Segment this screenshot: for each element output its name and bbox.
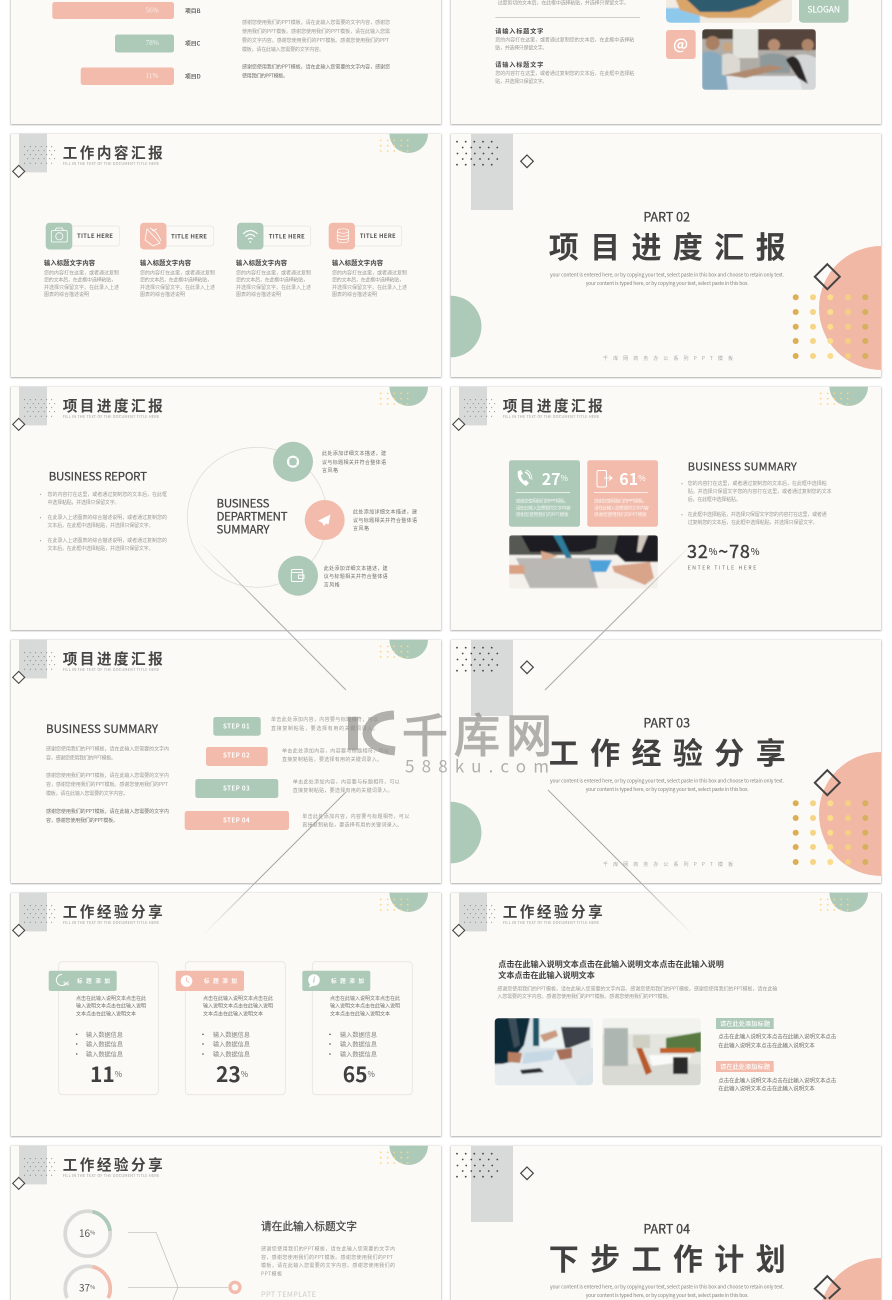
text block: node 1 <box>322 450 386 474</box>
heading: 项目进度汇报 <box>63 648 163 669</box>
text block: column 2 <box>140 258 215 298</box>
step 04: STEP 04 <box>223 815 250 824</box>
text block: summary: BUSINESS SUMMARY <box>46 721 159 737</box>
text block: business summary: 您的内容打在这里，或者通过复制您的文本后，在此框中选择粘 <box>688 480 827 487</box>
photo: laptop meeting <box>509 535 658 589</box>
card: 11 percent: 输入说明文本点击在此输入说明 <box>76 1002 146 1010</box>
stat card: 27 percent <box>509 460 580 527</box>
text block: column 2: 输入标题文字内容 <box>140 258 192 267</box>
text block: business summary: 在此框中选择粘贴，并选择只保留文字您的内容打在这里，或者通 <box>688 511 827 518</box>
stat card: 27 percent: 27% <box>542 466 569 490</box>
watermark: 588ku.com <box>405 752 549 778</box>
badge: slogan: SLOGAN <box>807 4 840 16</box>
heading: FILL IN THE TEXT OF THE DOCUMENT TITLE HERE <box>63 162 160 167</box>
text block: summary: 感谢您使用我们的PPT模板，请在此输入您需要的文字内 <box>46 772 169 779</box>
slide: section part 02 <box>451 134 881 377</box>
connector lines <box>128 1232 228 1300</box>
card: 23 percent: 标题添加 <box>204 977 237 985</box>
text block: node 2: 言风格 <box>353 525 369 532</box>
text block: bar notes: 感谢您使用我们的PPT模板，请在此输入您需要的文字内容，感谢您 <box>242 64 390 70</box>
step 04 <box>185 811 409 830</box>
watermark diagonal lines <box>197 540 693 935</box>
card: camera title: TITLE HERE <box>77 231 113 240</box>
section heading: 下步工作计划 <box>549 1235 786 1279</box>
text block: collage copy: 您的内容打在这里，或者通过复制您的文本后，在此框中选择粘 <box>495 36 634 44</box>
card: 65 percent: 输入说明文本点击在此输入说明 <box>330 1002 400 1010</box>
stat card: 27 percent: 请在此输入您需要的文字内容 <box>516 504 571 511</box>
section heading: 工作经验分享 <box>549 729 786 773</box>
card: 23 percent <box>176 962 285 1095</box>
step 02: 单击此处添加内容，内容要与标题相符，可以 <box>282 748 389 754</box>
heading: FILL IN THE TEXT OF THE DOCUMENT TITLE HERE <box>63 1174 160 1179</box>
text block: column 1: 图表的综合描述说明 <box>44 291 89 298</box>
section heading <box>549 206 786 362</box>
text block: summary: 模板，请在此输入您需要的文字内容。 <box>46 790 128 797</box>
section heading: your content is entered here, or by copying your text, select paste in this box and choose to retain only text. <box>550 1284 785 1290</box>
section heading: your content is typed here, or by copying your text, select paste in this box. <box>586 280 749 287</box>
text block: column 4: 您的内容打在这里，或者通过复制 <box>332 270 407 276</box>
card: 65 percent: 文本点击在此输入说明文本 <box>330 1010 390 1018</box>
text block: intro: 入您需要的文字内容。感谢您使用我们的PPT模板。感谢您使用我们的PPT模板。 <box>497 993 672 1000</box>
step 01: STEP 01 <box>223 721 250 730</box>
chart: ring 37 percent: 37% <box>79 1280 95 1294</box>
icon: wallet node <box>278 556 318 596</box>
note: green tag: 请在此处添加标题 <box>720 1019 770 1028</box>
header decoration <box>13 134 428 177</box>
section heading: PART 03 <box>643 712 690 731</box>
heading: 工作经验分享 <box>63 901 163 922</box>
watermark: 千库网 <box>402 700 552 766</box>
slide: two photos with notes <box>451 893 881 1136</box>
section decoration <box>451 640 881 876</box>
card: megaphone title: TITLE HERE <box>171 231 207 240</box>
card: 65 percent: 输入数据信息 <box>340 1050 377 1058</box>
photo: conference room <box>602 1018 701 1086</box>
heading: 工作经验分享 <box>503 901 603 922</box>
card: 11 percent: 点击在此输入说明文本点击在此 <box>76 995 146 1002</box>
card: 23 percent: 点击在此输入说明文本点击在此 <box>203 995 273 1002</box>
note: green tag: 点击在此输入说明文本点击在此输入说明文本点击 <box>718 1033 837 1041</box>
text block: summary: 容，感谢您使用我们的PPT模板。 <box>46 817 118 824</box>
stat card: 61 percent <box>587 460 658 527</box>
text block: node 3 <box>324 565 388 588</box>
text block: ring notes: 感谢您使用我们的PPT模板，请在此输入您需要的文字内 <box>261 1246 395 1252</box>
text block: column 3: 图表的综合描述说明 <box>236 291 281 298</box>
card: 11 percent: 标题添加 <box>77 977 110 985</box>
heading: FILL IN THE TEXT OF THE DOCUMENT TITLE HERE <box>503 415 600 420</box>
text block: column 3: 您的文本后，在此框中选择粘贴， <box>236 277 308 284</box>
text block: business report: 中选择粘贴，并选择只保留文字。 <box>48 499 120 506</box>
text block: node 1: 议与标题相关并符合整体语 <box>322 459 386 466</box>
card: megaphone title <box>140 223 214 250</box>
card: 11 percent: 11% <box>90 1059 123 1089</box>
text block: collage copy: 请输入标题文字 <box>495 26 543 36</box>
section heading: your content is entered here, or by copying your text, select paste in this box and choose to retain only text. <box>550 778 785 784</box>
chart: ring 16 percent: 16% <box>79 1225 95 1240</box>
text block: column 1: 您的文本后，在此框中选择粘贴， <box>44 277 116 284</box>
text block: column 1: 输入标题文字内容 <box>44 258 96 267</box>
slide: three percent cards <box>11 893 441 1136</box>
heading: FILL IN THE TEXT OF THE DOCUMENT TITLE HERE <box>63 668 160 673</box>
step 03 <box>195 778 400 798</box>
bar chart: horizontal project bars <box>52 2 201 85</box>
text block: intro: 感谢您使用我们的PPT模板，请在此输入您需要的文字内容。感谢您使用我们的PPT模板。感谢您使用我们的PPT模板，请在此输 <box>497 986 777 992</box>
text block: node 3: 议与标题相关并符合整体语 <box>324 573 388 580</box>
badge: at sign: @ <box>673 33 688 54</box>
card: 11 percent: 输入数据信息 <box>86 1030 123 1039</box>
card: 23 percent: 输入数据信息 <box>213 1040 250 1048</box>
text block: column 3: 您的内容打在这里，或者通过复制 <box>236 270 311 276</box>
step 01: 单击此处添加内容，内容要与标题相符，可以 <box>271 716 378 723</box>
card: database title: TITLE HERE <box>360 231 396 240</box>
step 03: 直接复制粘贴，要选择有用的关键词录入。 <box>293 787 393 794</box>
text block: column 3 <box>236 258 311 298</box>
text block: business report: BUSINESS REPORT <box>49 468 147 484</box>
icon: connector node <box>230 1282 240 1292</box>
icon: lifebuoy node <box>273 442 313 482</box>
step 02: 直接复制粘贴，要选择有用的关键词录入。 <box>282 756 382 763</box>
slide: project bars (cropped top left) <box>11 0 441 124</box>
section heading <box>549 1218 786 1299</box>
stat card: 61 percent: 感谢您使用我们的PPT模板。 <box>594 497 647 504</box>
text block: ring notes: 请在此输入标题文字 <box>261 1219 357 1234</box>
card: 23 percent: 23% <box>216 1059 249 1089</box>
stat card: 61 percent: 请在此输入您需要的文字内容 <box>594 504 649 511</box>
step 01: 直接复制粘贴，要选择有用的关键词录入。 <box>271 725 378 732</box>
header decoration <box>13 1146 428 1189</box>
text block: collage copy: 您的内容打在这里，或者通过复制您的文本后，在此框中选择粘 <box>495 70 634 77</box>
section heading: your content is typed here, or by copying your text, select paste in this box. <box>586 1292 749 1299</box>
text block: bar notes: 模板，请在此输入您需要的文字内容。 <box>242 46 324 53</box>
step 04: 直接复制粘贴，要选择有用的关键词录入。 <box>302 822 402 828</box>
text block: column 2: 您的内容打在这里，或者通过复制 <box>140 270 215 276</box>
text block: summary: 容，感谢您使用我们的PPT模板。 <box>46 754 116 762</box>
badge: at sign <box>666 30 696 59</box>
text block: business summary <box>681 459 832 526</box>
text block: node 3: 言风格 <box>324 582 340 588</box>
text block: intro: 点击在此输入说明文本点击在此输入说明文本点击在此输入说明 <box>498 959 724 970</box>
section heading <box>549 712 786 868</box>
text block: business report: 在此录入上述图表的综合描述说明，或者通过复制您的 <box>48 537 167 544</box>
card: 65 percent: 输入数据信息 <box>340 1030 377 1039</box>
section decoration <box>456 1146 881 1300</box>
card: 11 percent <box>49 962 158 1095</box>
text block: ring notes: PPT TEMPLATE <box>261 1289 316 1300</box>
photo: business discussion <box>494 1018 594 1086</box>
card: camera title <box>46 223 120 250</box>
heading: 项目进度汇报 <box>503 395 603 416</box>
photo: calculator <box>666 0 792 23</box>
card: 65 percent <box>302 962 412 1095</box>
slide: business report circle diagram <box>11 387 441 630</box>
card: 23 percent: 输入数据信息 <box>213 1050 250 1058</box>
badge: slogan <box>799 0 848 23</box>
card: 11 percent: 输入数据信息 <box>86 1040 123 1048</box>
text block: column 4: 并选择只保留文字。在此录入上述 <box>332 284 407 291</box>
heading: FILL IN THE TEXT OF THE DOCUMENT TITLE HERE <box>63 921 160 926</box>
chart: ring 16 percent <box>65 1211 110 1256</box>
text block: bar notes: 使用我们的PPT模板。感谢您使用我们的PPT模板，请在此输入您需 <box>242 28 390 35</box>
bar chart: horizontal project bars: 56% <box>146 6 159 14</box>
diagram: department circle <box>187 442 345 596</box>
text block: business report <box>40 468 167 552</box>
text block: collage copy: 贴，并选择只保留文字。 <box>495 78 547 85</box>
text block: collage copy: 贴，并选择只保留文字。 <box>495 44 547 52</box>
card: wifi title <box>237 223 311 250</box>
text block: column 3: 输入标题文字内容 <box>236 258 288 267</box>
heading: 工作内容汇报 <box>63 142 163 163</box>
step 02 <box>206 747 389 766</box>
slide: work content report <box>11 134 441 377</box>
bar chart: horizontal project bars: 11% <box>146 72 158 80</box>
chart: ring 37 percent <box>65 1266 110 1298</box>
section heading: PART 04 <box>643 1218 690 1237</box>
photo: team meeting <box>702 29 816 90</box>
text block: node 1: 言风格 <box>322 467 338 474</box>
heading: 工作经验分享 <box>63 1154 163 1175</box>
text block: node 2: 此处添加详细文本描述，建 <box>353 508 417 516</box>
text block: ring notes: 容，感谢您使用我们的PPT模板。感谢您使用我们的PPT <box>261 1254 393 1261</box>
stat card: 61 percent: 感谢您使用我们的PPT模板 <box>594 511 647 518</box>
text block: column 1: 并选择只保留文字。在此录入上述 <box>44 284 119 291</box>
card: 11 percent: 文本点击在此输入说明文本 <box>76 1010 136 1018</box>
card: wifi title: TITLE HERE <box>269 231 305 240</box>
watermark <box>353 700 552 778</box>
card: 65 percent: 标题添加 <box>331 977 364 985</box>
slide: business summary steps <box>11 640 441 883</box>
header decoration <box>453 387 868 430</box>
note: green tag: 在此输入说明文本点击在此输入说明文本 <box>718 1041 815 1049</box>
text block: ring notes <box>261 1219 395 1300</box>
text block: summary <box>46 721 169 824</box>
icon: wifi <box>243 230 258 243</box>
icon: phone call <box>518 470 532 486</box>
text block: column 1 <box>44 258 119 298</box>
step 03: STEP 03 <box>223 784 250 792</box>
note: green tag <box>716 1018 837 1049</box>
header decoration <box>13 640 428 683</box>
header decoration <box>13 387 428 430</box>
section decoration <box>451 134 881 370</box>
heading: FILL IN THE TEXT OF THE DOCUMENT TITLE HERE <box>63 415 160 420</box>
card: 65 percent: 65% <box>343 1059 375 1089</box>
text block: bar notes <box>242 19 390 80</box>
section heading: your content is entered here, or by copying your text, select paste in this box and choose to retain only text. <box>550 272 785 278</box>
card: 11 percent: 输入数据信息 <box>86 1050 123 1058</box>
icon: phone share <box>597 470 612 487</box>
slide: text and photo collage (cropped top right) <box>451 0 881 124</box>
text block: column 3: 并选择只保留文字。在此录入上述 <box>236 284 311 291</box>
text block: business summary: BUSINESS SUMMARY <box>688 459 797 475</box>
header decoration <box>13 893 428 936</box>
text block: business summary: 后，在此框中选择粘贴。 <box>688 496 741 503</box>
diagram: department circle: DEPARTMENT <box>216 508 288 524</box>
step 01 <box>213 716 378 736</box>
card: 23 percent: 输入数据信息 <box>213 1030 250 1039</box>
text block: business report: 文本后，在此框中选择粘贴，并选择只保留文字。 <box>48 522 154 529</box>
section heading: your content is typed here, or by copying your text, select paste in this box. <box>586 786 749 793</box>
bar chart: horizontal project bars: 项目D <box>185 72 201 80</box>
heading: FILL IN THE TEXT OF THE DOCUMENT TITLE HERE <box>503 921 600 926</box>
note: pink tag: 请在此处添加标题 <box>720 1062 770 1071</box>
text block: summary: 容，感谢您使用我们的PPT模板。感谢您使用我们的PPT <box>46 781 168 788</box>
text block: ring notes: PPT模板 <box>261 1270 282 1278</box>
text block: column 4: 您的文本后，在此框中选择粘贴， <box>332 277 404 284</box>
text block: ring notes: 模板，请在此输入您需要的文字内容。感谢您使用我们的 <box>261 1262 395 1269</box>
slide: section part 03 <box>451 640 881 883</box>
note: pink tag: 点击在此输入说明文本点击在此输入说明文本点击 <box>718 1076 837 1084</box>
text block: node 3: 此处添加详细文本描述，建 <box>324 565 388 572</box>
text block: node 2 <box>353 508 417 532</box>
text block: summary: 感谢您使用我们的PPT模板，请在此输入您需要的文字内 <box>46 808 169 815</box>
text block: business report: 在此录入上述图表的综合描述说明，或者通过复制您的 <box>48 514 167 521</box>
card: database title <box>329 223 402 250</box>
text block: business report: 您的内容打在这里，或者通过复制您的文本后，在此框 <box>48 491 167 498</box>
icon: paper plane node <box>305 500 345 540</box>
text block: business summary: 贴。并选择只保留文字您的内容打在这里，或者通过复制您的文本 <box>688 488 832 495</box>
stat: range: 32%~78% <box>687 538 760 564</box>
stat card: 27 percent: 感谢您使用我们的PPT模板 <box>516 511 569 518</box>
text block: business report: 文本后，在此框中选择粘贴，并选择只保留文字。 <box>48 545 154 552</box>
text block: intro <box>497 959 777 1000</box>
text block: column 4: 输入标题文字内容 <box>332 258 384 267</box>
section heading: 项目进度汇报 <box>549 223 786 267</box>
text block: node 1: 此处添加详细文本描述，建 <box>322 450 386 457</box>
slide: business summary stats <box>451 387 881 630</box>
slide: ring charts <box>11 1146 441 1300</box>
diagram: department circle: BUSINESS <box>216 495 270 511</box>
text block: node 2: 议与标题相关并符合整体语 <box>353 517 417 524</box>
header decoration <box>453 893 868 936</box>
section heading: 千库网商务办公系列PPT模板 <box>603 861 733 868</box>
step 04: 单击此处添加内容，内容要与标题相符，可以 <box>302 813 409 820</box>
card: 23 percent: 文本点击在此输入说明文本 <box>203 1010 263 1018</box>
text block: column 4 <box>332 258 407 298</box>
stat card: 61 percent: 61% <box>619 466 646 490</box>
diagram: department circle: SUMMARY <box>216 521 270 537</box>
slide: section part 04 <box>451 1146 881 1300</box>
text block: column 1: 您的内容打在这里，或者通过复制 <box>44 270 119 276</box>
note: pink tag <box>716 1061 837 1093</box>
text block: bar notes: 使用我们的PPT模板。 <box>242 72 288 80</box>
stat: range: ENTER TITLE HERE <box>688 564 756 572</box>
card: 23 percent: 输入说明文本点击在此输入说明 <box>203 1002 273 1010</box>
text block: bar notes: 要的文字内容。感谢您使用我们的PPT模板。感谢您使用我们的PPT <box>242 37 389 44</box>
text block: column 2: 图表的综合描述说明 <box>140 291 185 298</box>
text block: business summary: 过复制您的文本后，在此框中选择粘贴，并选择只保留文字。 <box>688 519 818 526</box>
text block: column 2: 并选择只保留文字。在此录入上述 <box>140 284 215 291</box>
card: 65 percent: 输入数据信息 <box>340 1040 377 1048</box>
icon: database <box>337 229 349 243</box>
stat card: 27 percent: 感谢您使用我们的PPT模板。 <box>516 497 569 504</box>
text block: collage copy: 请输入标题文字 <box>495 60 543 69</box>
step 02: STEP 02 <box>223 750 250 760</box>
text block: collage copy <box>495 0 640 85</box>
note: pink tag: 在此输入说明文本点击在此输入说明文本 <box>718 1085 815 1093</box>
icon: 24 hours: 24 <box>63 980 69 988</box>
section heading: 千库网商务办公系列PPT模板 <box>603 355 733 362</box>
text block: column 2: 您的文本后，在此框中选择粘贴， <box>140 277 212 284</box>
text block: column 4: 图表的综合描述说明 <box>332 291 377 298</box>
bar chart: horizontal project bars: 项目B <box>185 6 201 15</box>
icon: camera <box>51 228 67 242</box>
card: 65 percent: 点击在此输入说明文本点击在此 <box>330 995 400 1002</box>
text block: intro: 文本点击在此输入说明文本 <box>498 970 595 981</box>
heading: 项目进度汇报 <box>63 395 163 416</box>
icon: megaphone <box>145 228 161 246</box>
step 03: 单击此处添加内容，内容要与标题相符，可以 <box>293 778 400 786</box>
text block: bar notes: 感谢您使用我们的PPT模板，请在此输入您需要的文字内容，感谢您 <box>242 19 390 26</box>
bar chart: horizontal project bars: 项目C <box>185 38 201 48</box>
text block: summary: 感谢您使用我们的PPT模板，请在此输入您需要的文字内 <box>46 746 169 752</box>
icon: info bubble: i <box>313 976 316 984</box>
section heading: PART 02 <box>643 206 690 225</box>
bar chart: horizontal project bars: 78% <box>146 39 159 47</box>
icon: clock <box>181 975 192 987</box>
